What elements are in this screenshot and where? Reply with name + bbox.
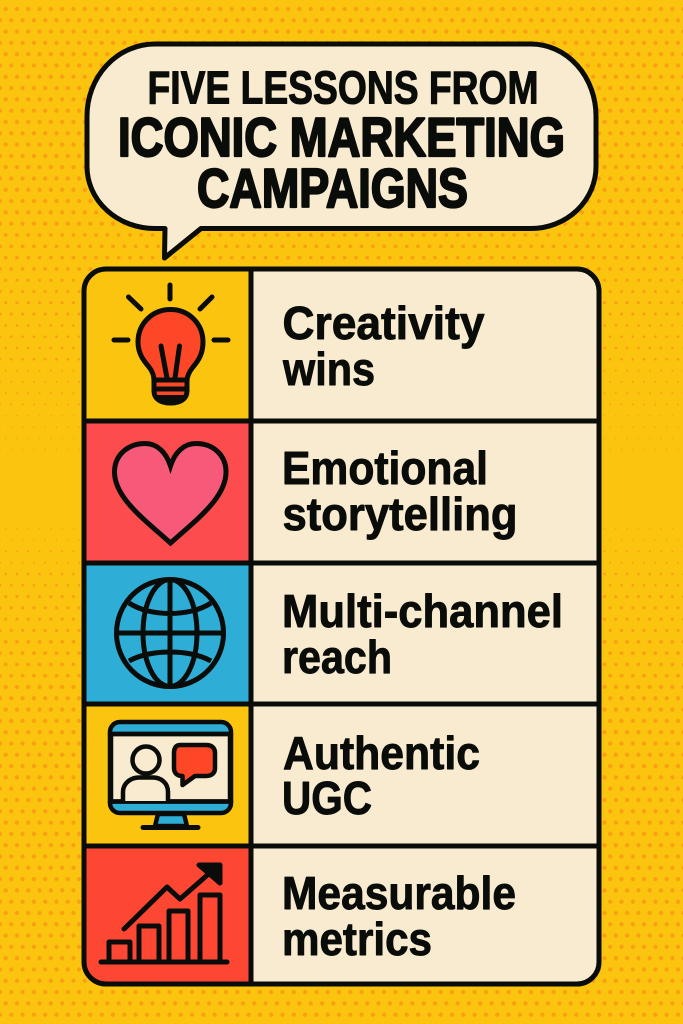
lesson 1 text: Creativity xyxy=(282,297,485,349)
lesson 2 text: Emotional xyxy=(282,442,488,494)
lesson 4 text: UGC xyxy=(282,772,372,824)
lesson 5 text xyxy=(282,867,516,965)
icon: growth bar chart with arrow xyxy=(101,865,227,962)
lesson 3 text: Multi-channel xyxy=(282,585,563,637)
lesson 5 text: metrics xyxy=(282,913,432,965)
lessons table xyxy=(84,269,599,986)
lesson 4 text: Authentic xyxy=(283,727,480,779)
lesson 2 text xyxy=(282,442,518,540)
icon: light bulb xyxy=(114,285,228,403)
icon: monitor with person and speech bubble xyxy=(110,722,231,828)
lesson 4 text xyxy=(282,727,480,824)
lesson 3 text xyxy=(282,585,563,683)
title heading: ICONIC MARKETING xyxy=(118,106,565,168)
icon: globe xyxy=(116,580,224,686)
lesson 1 text xyxy=(282,297,485,395)
lesson 3 text: reach xyxy=(282,631,392,683)
lesson 2 text: storytelling xyxy=(282,488,518,540)
title heading: CAMPAIGNS xyxy=(197,157,468,219)
lesson 1 text: wins xyxy=(282,343,375,395)
title heading xyxy=(118,62,565,219)
icon: heart xyxy=(114,444,226,543)
title speech bubble xyxy=(87,44,596,258)
lesson 5 text: Measurable xyxy=(282,867,516,919)
title heading: FIVE LESSONS FROM xyxy=(148,62,538,114)
